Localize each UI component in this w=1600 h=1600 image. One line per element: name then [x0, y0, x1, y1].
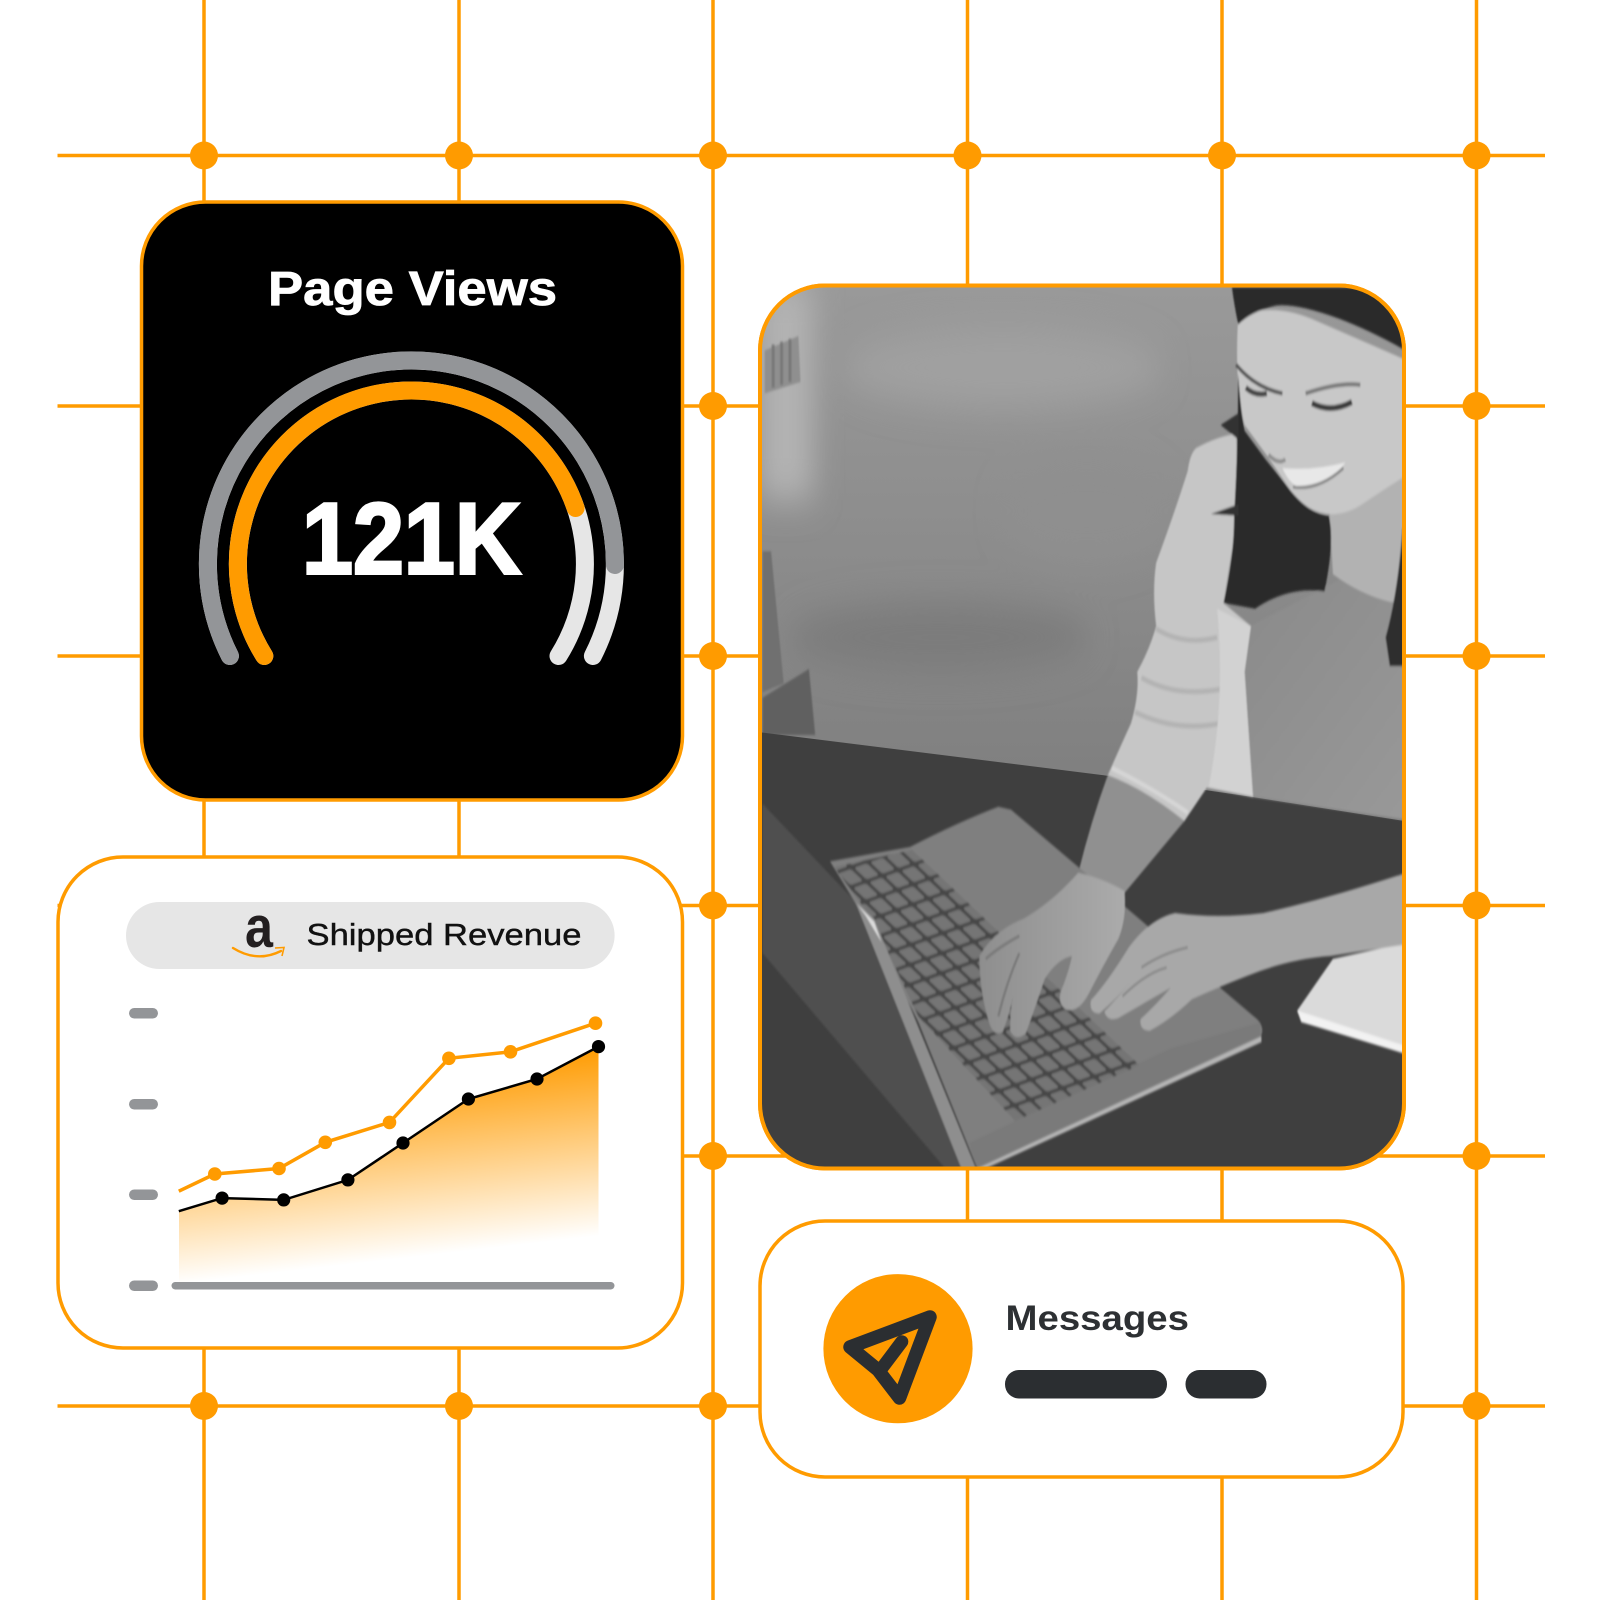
panel: messages	[760, 1221, 1403, 1477]
line series: black	[179, 1040, 605, 1211]
facial details	[1236, 365, 1282, 393]
pill header	[126, 902, 615, 969]
panel: photo of woman typing on a laptop	[750, 270, 1423, 1189]
placeholder bar: long	[1005, 1370, 1167, 1398]
gauge: inner progress	[238, 390, 585, 656]
y axis ticks	[129, 1008, 158, 1291]
icon: send arrow	[823, 1274, 973, 1423]
icon: amazon logo: a	[245, 895, 274, 960]
cardigan	[1108, 434, 1253, 821]
panel: page views gauge	[142, 202, 682, 800]
line series: orange	[179, 1016, 602, 1191]
right arm and hand	[1091, 867, 1423, 1031]
panel: shipped revenue chart	[58, 857, 682, 1348]
tablet	[1296, 943, 1402, 1047]
laptop base	[830, 807, 1262, 1168]
neck	[1328, 478, 1402, 603]
gauge: outer track	[208, 360, 615, 656]
desk	[750, 731, 1423, 1189]
face	[1237, 310, 1423, 514]
value: 121K: 121K	[302, 484, 521, 596]
wall	[762, 288, 1402, 820]
label: messages: Messages	[1006, 1299, 1189, 1338]
keyboard	[834, 850, 1139, 1121]
far arm	[1078, 775, 1184, 893]
hand on keyboard	[979, 873, 1125, 1037]
top	[1245, 586, 1402, 820]
hair	[1231, 288, 1402, 350]
laptop lid	[763, 804, 973, 1171]
pill label: Shipped Revenue	[306, 917, 582, 952]
placeholder bar: short	[1186, 1370, 1266, 1398]
area fill	[179, 1047, 598, 1284]
x axis	[172, 1282, 614, 1290]
icon: amazon logo	[233, 895, 284, 960]
heading: page views: Page Views	[268, 263, 557, 316]
